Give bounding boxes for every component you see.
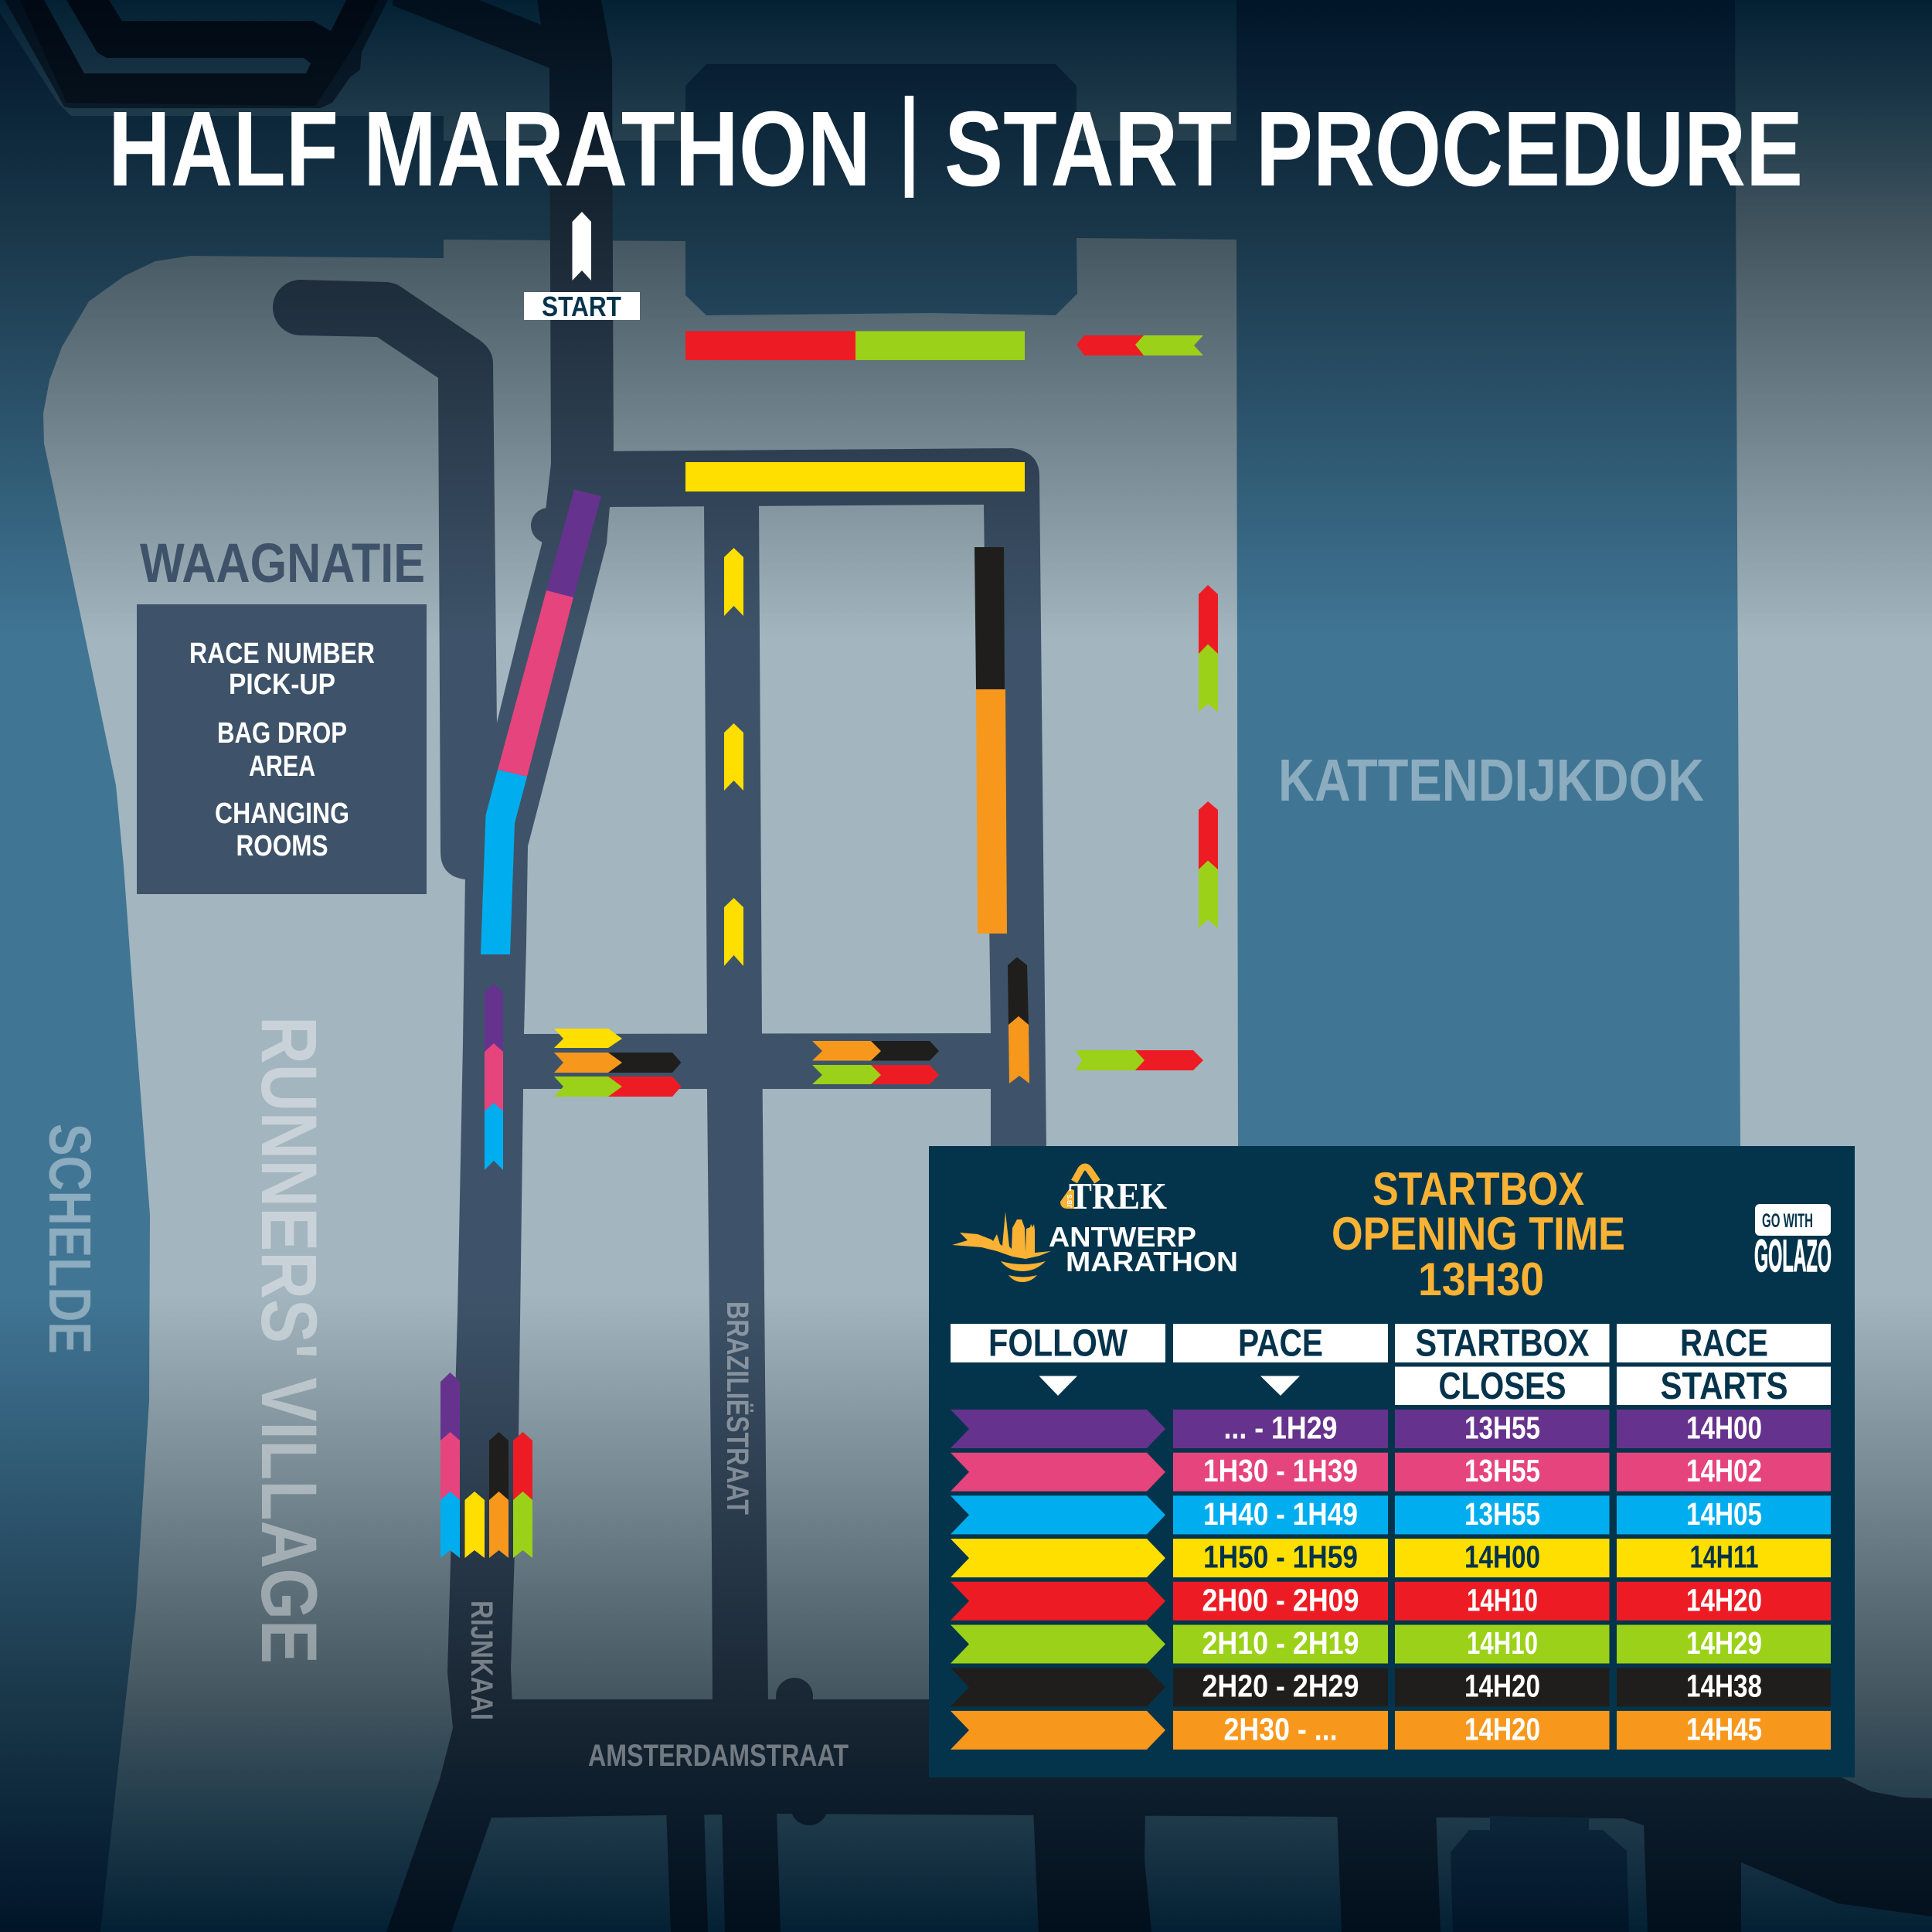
logo: jb's trek antwerp marathon: JB'S — [1066, 1194, 1073, 1208]
row: orange — [951, 1711, 1831, 1750]
startbox bar: yellow — [685, 462, 1025, 492]
title: PROCEDURE — [1256, 90, 1803, 209]
row: blue — [951, 1495, 1831, 1534]
table headers: STARTBOX — [1416, 1323, 1590, 1365]
arrows: red green heading north, upper — [1199, 585, 1218, 712]
waagnatie heading: WAAGNATIE — [140, 533, 425, 594]
row: black: 14H20 — [1464, 1668, 1540, 1704]
title: MARATHON — [363, 90, 871, 209]
arrows: black orange heading north — [1008, 957, 1029, 1083]
row: yellow — [951, 1539, 1831, 1577]
row: purple: ... - 1H29 — [1224, 1410, 1337, 1445]
arrows: red green heading north, lower — [1199, 801, 1218, 928]
startbox bars: purple, pink, blue — [481, 490, 601, 954]
row: pink — [951, 1453, 1831, 1492]
label: runners' village: RUNNERS' VILLAGE — [245, 1016, 333, 1664]
row: green: 14H29 — [1686, 1625, 1762, 1661]
panel: waagnatie services — [137, 604, 427, 894]
row: green — [951, 1624, 1831, 1663]
row: pink: 14H02 — [1686, 1453, 1762, 1488]
row: pink: 1H30 - 1H39 — [1203, 1453, 1358, 1488]
row: black: 14H38 — [1686, 1668, 1762, 1704]
logo: go with golazo — [1754, 1204, 1832, 1281]
row: black: 2H20 - 2H29 — [1202, 1668, 1359, 1704]
panel: waagnatie services: RACE NUMBER — [189, 638, 375, 670]
arrows: yellow on braziliestraat — [724, 548, 743, 966]
panel: waagnatie services: AREA — [249, 750, 315, 783]
table headers: STARTS — [1660, 1366, 1788, 1407]
table headers: RACE — [1680, 1323, 1768, 1365]
heading: startbox opening time: STARTBOX — [1372, 1163, 1584, 1215]
row: pink: 13H55 — [1464, 1453, 1540, 1488]
land: north quay — [0, 0, 1236, 141]
logo: go with golazo: GO WITH — [1762, 1210, 1813, 1232]
logo: jb's trek antwerp marathon — [952, 1167, 1238, 1282]
row: orange: 2H30 - ... — [1224, 1711, 1337, 1747]
row: green: 14H10 — [1467, 1625, 1538, 1661]
logo: jb's trek antwerp marathon: MARATHON — [1066, 1246, 1238, 1277]
arrow: red green heading left — [1077, 335, 1203, 355]
panel: waagnatie services: CHANGING — [215, 798, 349, 830]
row: purple — [951, 1410, 1831, 1448]
label: kattendijkdok: KATTENDIJKDOK — [1278, 747, 1704, 814]
start marker — [524, 212, 640, 322]
logo: jb's trek antwerp marathon: TREK — [1069, 1175, 1167, 1217]
panel: waagnatie services: PICK-UP — [229, 668, 335, 701]
label: braziliestraat: BRAZILIËSTRAAT — [720, 1301, 754, 1515]
row: blue: 14H05 — [1686, 1496, 1762, 1532]
arrows: purple pink blue on rijnkaai — [485, 984, 503, 1170]
logo: jb's trek antwerp marathon: ANTWERP — [1049, 1221, 1196, 1253]
title: | — [895, 76, 923, 199]
label: schelde: SCHELDE — [36, 1124, 103, 1354]
row: blue: 1H40 - 1H49 — [1203, 1496, 1358, 1532]
row: purple: 14H00 — [1686, 1410, 1762, 1445]
arrows: cross street west — [554, 1029, 682, 1097]
table headers: FOLLOW — [988, 1323, 1128, 1365]
table headers: PACE — [1238, 1323, 1323, 1365]
row: orange: 14H20 — [1464, 1711, 1540, 1747]
table headers: CLOSES — [1439, 1366, 1566, 1407]
arrows: cross street east — [812, 1041, 939, 1084]
row: black — [951, 1668, 1831, 1706]
panel: startbox schedule — [929, 1146, 1855, 1777]
row: red: 2H00 - 2H09 — [1202, 1582, 1359, 1617]
panel: waagnatie services: ROOMS — [236, 830, 328, 862]
land: east quay — [1735, 0, 1932, 1808]
title — [108, 76, 1803, 209]
start label — [524, 292, 640, 320]
title: HALF — [108, 90, 338, 209]
label: amsterdamstraat: AMSTERDAMSTRAAT — [588, 1739, 849, 1773]
start marker: START — [542, 291, 621, 322]
row: yellow: 14H11 — [1689, 1539, 1759, 1575]
row: yellow: 1H50 - 1H59 — [1203, 1539, 1358, 1575]
row: red: 14H20 — [1686, 1582, 1762, 1617]
label: rijnkaai: RIJNKAAI — [464, 1600, 498, 1720]
heading: startbox opening time — [1332, 1163, 1625, 1305]
row: orange: 14H45 — [1686, 1711, 1762, 1747]
row: red — [951, 1582, 1831, 1621]
row: green: 2H10 - 2H19 — [1202, 1625, 1359, 1661]
title: START — [944, 90, 1232, 209]
row: red: 14H10 — [1467, 1582, 1538, 1617]
row: purple: 13H55 — [1464, 1410, 1540, 1445]
startbox bars: red and green — [685, 331, 1025, 360]
startbox bars: black and orange — [975, 547, 1007, 934]
row: blue: 13H55 — [1464, 1496, 1540, 1532]
row: yellow: 14H00 — [1464, 1539, 1540, 1575]
table headers — [951, 1323, 1831, 1407]
panel: waagnatie services: BAG DROP — [217, 717, 347, 750]
icon: start arrow — [572, 212, 591, 281]
heading: startbox opening time: 13H30 — [1418, 1253, 1544, 1305]
arrows: entry cluster on rijnkaai — [440, 1372, 532, 1558]
heading: startbox opening time: OPENING TIME — [1332, 1208, 1625, 1260]
arrow: green red heading right — [1076, 1050, 1203, 1070]
